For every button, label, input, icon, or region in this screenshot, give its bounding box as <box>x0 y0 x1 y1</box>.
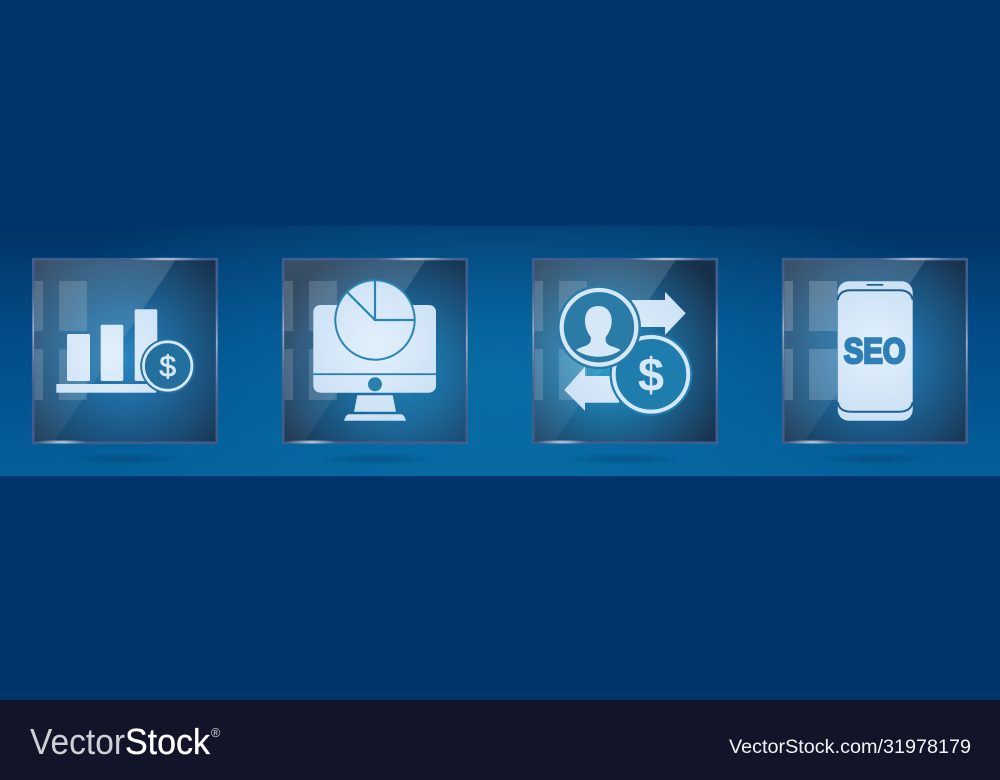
icon: dollar coin: $ <box>638 348 664 401</box>
arrow: left <box>564 367 619 411</box>
icon: bar chart <box>56 309 157 393</box>
VectorStock logo: Vector <box>30 721 125 762</box>
panel: person and money exchange <box>532 257 718 465</box>
arrow: right <box>632 292 686 335</box>
icon: pie chart <box>335 280 415 360</box>
VectorStock logo: Stock <box>125 721 211 762</box>
icon: dollar coin <box>610 333 692 416</box>
footer bar <box>0 700 1000 780</box>
panel: smartphone SEO <box>782 257 968 465</box>
text: SEO: SEO <box>844 332 906 371</box>
central band <box>0 226 1000 476</box>
icon: monitor <box>313 305 436 421</box>
VectorStock logo: ® <box>211 726 221 740</box>
VectorStock logo <box>30 721 221 762</box>
panel: bar chart with dollar coin <box>32 257 218 465</box>
icon: dollar coin: $ <box>159 350 176 384</box>
icon: person <box>557 285 641 369</box>
panel: monitor with pie chart <box>282 257 468 465</box>
icon: dollar coin <box>140 338 195 394</box>
icon: smartphone <box>838 281 913 421</box>
image id text: VectorStock.com/31978179 <box>729 736 971 758</box>
